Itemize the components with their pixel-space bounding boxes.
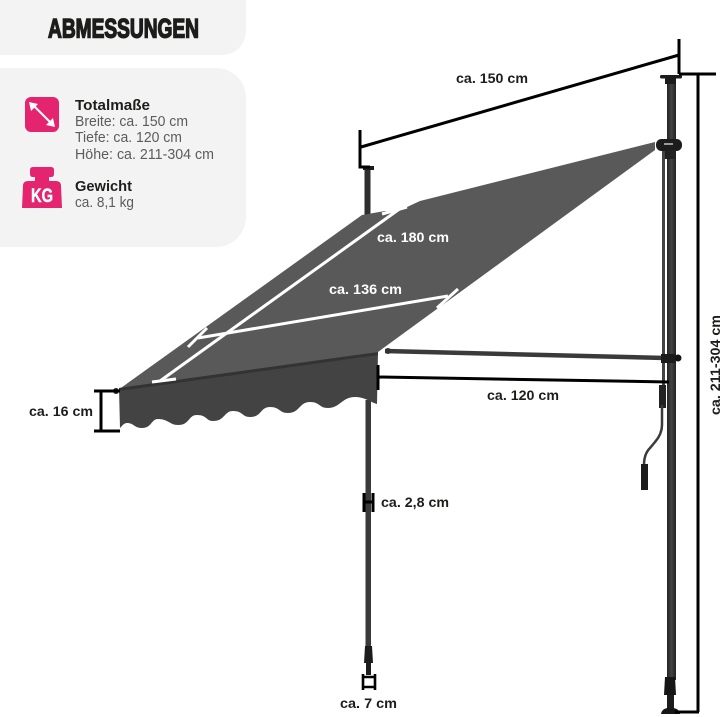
text: total dimensions: Breite: ca. 150 cm (75, 114, 188, 130)
dimension: foot 7 (340, 674, 397, 711)
text: weight: ca. 8,1 kg (75, 195, 134, 211)
icon: weight: KG (31, 186, 53, 207)
canopy (118, 142, 655, 390)
text: total dimensions (75, 98, 214, 163)
crank handle (641, 385, 666, 490)
panel: specifications (0, 68, 246, 247)
thin rod (662, 150, 665, 385)
text: weight (75, 179, 134, 211)
valance (119, 352, 378, 428)
icon: weight (22, 167, 62, 208)
text: total dimensions: Höhe: ca. 211-304 cm (75, 147, 214, 163)
dimension: width 150: ca. 150 cm (456, 70, 528, 86)
dimension: height (675, 74, 720, 712)
bracket (656, 139, 682, 159)
icon: dimensions arrow (25, 97, 59, 132)
title panel (0, 0, 246, 55)
title: ABMESSUNGEN (48, 14, 199, 44)
white measuring line: depth (152, 205, 407, 382)
label: canopy width: ca. 136 cm (329, 281, 402, 297)
dimension: post 2,8: ca. 2,8 cm (381, 494, 449, 510)
arm (385, 348, 682, 363)
left post lower (364, 400, 373, 675)
dimension: depth 120 (378, 365, 669, 403)
label: canopy length: ca. 180 cm (377, 229, 449, 245)
right post (660, 75, 682, 714)
white measuring line: width (188, 289, 458, 347)
dimension: post 2,8 (364, 493, 449, 512)
text: total dimensions: Tiefe: ca. 120 cm (75, 130, 182, 146)
dimension: foot 7: ca. 7 cm (340, 695, 397, 711)
dimension: valance 16: ca. 16 cm (29, 403, 93, 419)
dimension: depth 120: ca. 120 cm (487, 387, 559, 403)
dimension: width 150 (360, 39, 679, 167)
dimension: valance 16 (29, 391, 120, 431)
text: weight: Gewicht (75, 179, 132, 195)
front rail (119, 352, 378, 391)
left post upper (364, 167, 370, 217)
text: total dimensions: Totalmaße (75, 98, 150, 114)
awning illustration (113, 75, 682, 714)
